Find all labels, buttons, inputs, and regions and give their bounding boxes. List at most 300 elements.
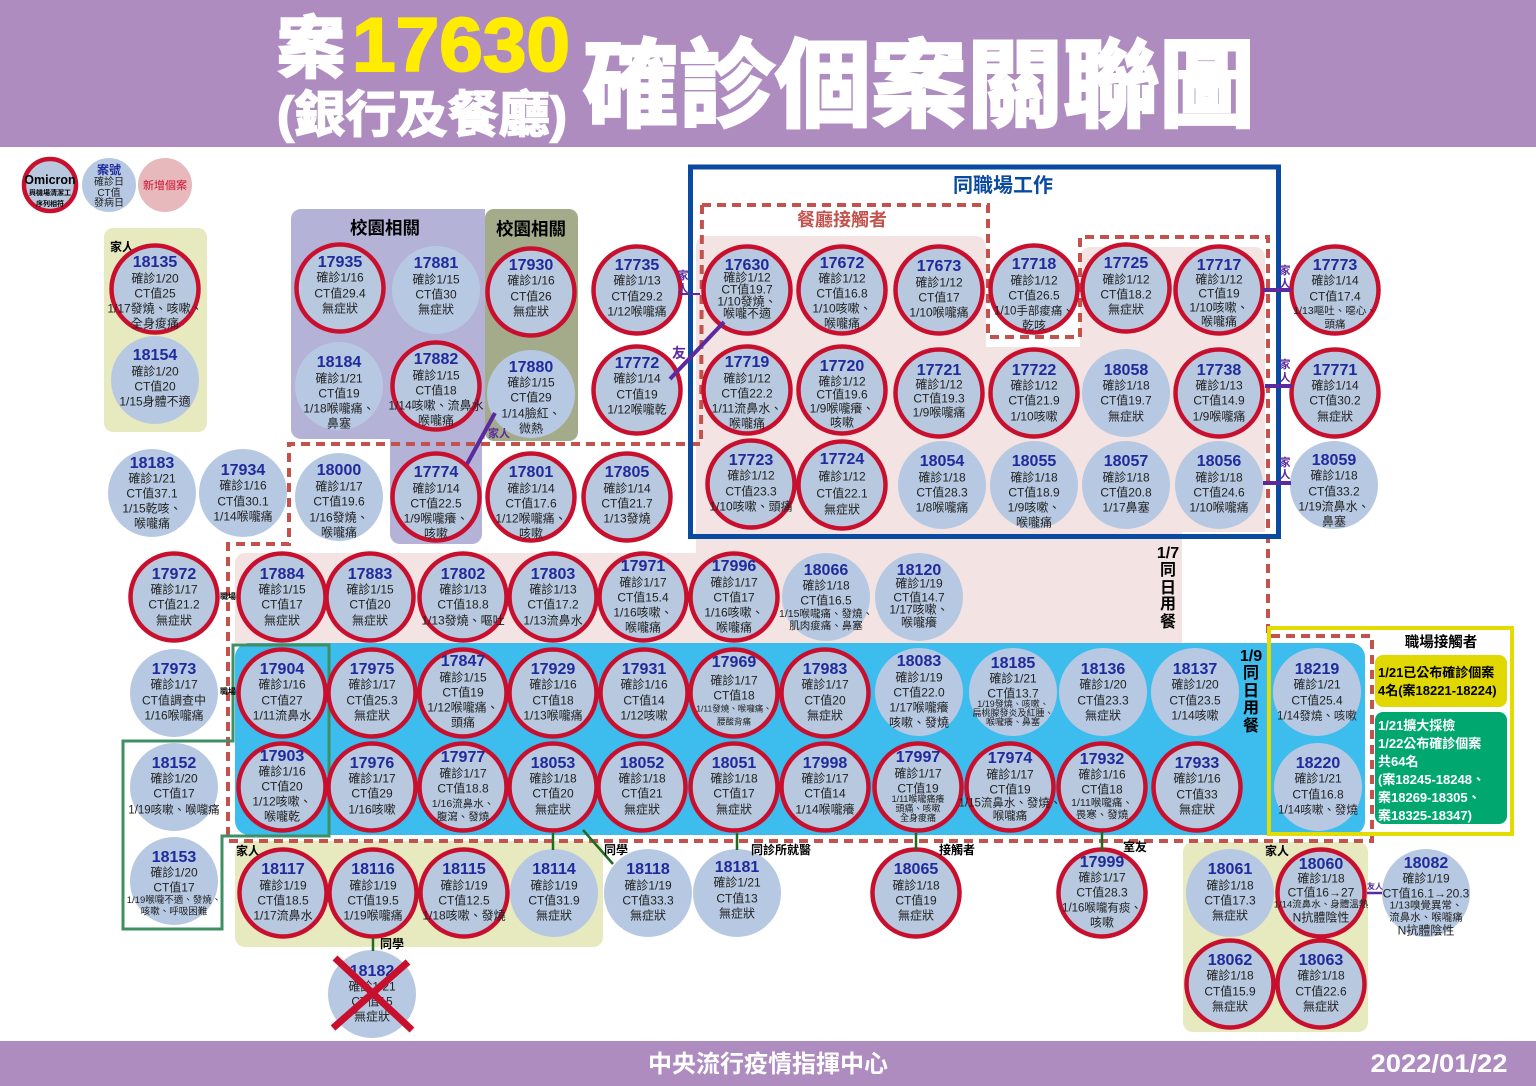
case 17983: 17983 xyxy=(803,661,847,678)
case 17738 xyxy=(1176,350,1262,436)
case 17847: 確診1/15 xyxy=(439,670,487,684)
case 17672: 確診1/12 xyxy=(818,270,866,286)
case 17773: 頭痛 xyxy=(1324,318,1346,330)
legend: omicron: Omicron xyxy=(24,173,76,187)
case 17904: CT值27 xyxy=(261,692,303,708)
case 18153: 咳嗽、呼吸困難 xyxy=(141,906,208,918)
case 17975: 確診1/17 xyxy=(348,676,396,692)
case 17971 xyxy=(600,554,686,640)
case 18058: 18058 xyxy=(1104,362,1148,379)
case 18183: CT值37.1 xyxy=(126,486,178,500)
case 18185 xyxy=(969,648,1057,736)
case 18082: N抗體陰性 xyxy=(1398,922,1454,938)
case 17738: CT值14.9 xyxy=(1193,392,1245,408)
legend: new case xyxy=(138,158,192,212)
panel: family bottom xyxy=(235,841,603,947)
case 18153: CT值17 xyxy=(153,880,195,894)
case 17929: 17929 xyxy=(531,661,575,678)
case 17976 xyxy=(328,744,416,830)
case 17772: 17772 xyxy=(615,355,659,372)
case 17801: 1/12喉嚨痛、 xyxy=(495,510,567,526)
case 18057: 1/17鼻塞 xyxy=(1102,500,1150,514)
case 17880 xyxy=(487,350,575,438)
case 18135: 1/17發燒、咳嗽、 xyxy=(107,300,203,316)
case 17672: 1/10咳嗽、 xyxy=(812,302,872,316)
case 18066: 肌肉痠痛、鼻塞 xyxy=(789,619,863,632)
case 17903: 喉嚨乾 xyxy=(264,808,300,824)
case 17720: 咳嗽 xyxy=(830,416,854,430)
case 17932: CT值18 xyxy=(1081,782,1123,796)
case 17983: 確診1/17 xyxy=(801,676,849,692)
case 18183: 喉嚨痛 xyxy=(134,516,170,530)
case 18051 xyxy=(690,744,778,830)
case 18053: CT值20 xyxy=(532,786,574,800)
case 18053: 確診1/18 xyxy=(529,770,577,786)
case 17904 xyxy=(238,650,326,736)
heading: restaurant contacts: 餐廳接觸者 xyxy=(797,209,887,230)
case 17738: 17738 xyxy=(1197,362,1241,379)
case 18058: CT值19.7 xyxy=(1100,392,1152,408)
case 17933: 無症狀 xyxy=(1179,802,1215,816)
case 17720: 17720 xyxy=(820,358,864,375)
link: 17735 to 17630 family: 家 xyxy=(678,268,688,282)
case 18082: 確診1/19 xyxy=(1402,870,1450,886)
case 18120: 確診1/19 xyxy=(895,576,943,590)
case 18136: CT值23.3 xyxy=(1077,692,1129,708)
case 17717: 喉嚨痛 xyxy=(1201,314,1237,328)
label: 1/9 same-day meal xyxy=(1240,648,1262,735)
case 18051: CT值17 xyxy=(713,786,755,800)
case 18115: 確診1/19 xyxy=(440,878,488,892)
case 17717: 17717 xyxy=(1197,257,1241,274)
case 18117: 1/17流鼻水 xyxy=(253,908,313,922)
case 18135 xyxy=(107,246,203,332)
family label: 家人 xyxy=(1265,843,1289,858)
title: case number: 17630 xyxy=(352,3,570,88)
legend: omicron: 與機場清潔工 xyxy=(29,188,71,197)
case 18120: 喉嚨癢 xyxy=(901,614,937,630)
case 17935: 17935 xyxy=(318,254,362,271)
case 17883: CT值20 xyxy=(349,596,391,612)
case 17884: 無症狀 xyxy=(264,612,300,628)
link: 17717 to 17773 family xyxy=(1263,263,1291,290)
case 17735: 確診1/13 xyxy=(613,272,661,288)
case 17983: 無症狀 xyxy=(807,708,843,722)
case 18058: 無症狀 xyxy=(1108,408,1144,424)
case 18057: 18057 xyxy=(1104,453,1148,470)
case 18059: 確診1/18 xyxy=(1310,468,1358,482)
case 17880: 17880 xyxy=(509,359,553,376)
case 18181 xyxy=(693,849,781,937)
case 18114: CT值31.9 xyxy=(528,892,580,908)
panel: family left xyxy=(104,228,207,432)
case 18117: 18117 xyxy=(261,861,305,878)
case 17720: CT值19.6 xyxy=(816,386,868,402)
case 17773: CT值17.4 xyxy=(1309,288,1361,304)
case 18083: 咳嗽、發燒 xyxy=(889,714,949,730)
case 18060: 1/14流鼻水、身體溫熱 xyxy=(1274,898,1369,910)
case 17977: CT值18.8 xyxy=(437,780,489,796)
case 17773: 17773 xyxy=(1313,257,1357,274)
case 17904: 17904 xyxy=(260,661,304,678)
case 17931: 1/12咳嗽 xyxy=(620,708,668,722)
case 17738: 1/9喉嚨痛 xyxy=(1193,408,1245,424)
case 17724: 無症狀 xyxy=(824,502,860,516)
footer agency: 中央流行疫情指揮中心 xyxy=(648,1051,888,1078)
case 17930: 確診1/16 xyxy=(507,272,555,288)
case 17931: 確診1/16 xyxy=(620,676,668,692)
callout: 1/22 cases: (案18245-18248、 xyxy=(1378,772,1485,787)
case 17771: 17771 xyxy=(1313,362,1357,379)
case 18183: 確診1/21 xyxy=(128,470,176,486)
link: 18060 to 18082 friend: 友人 xyxy=(1367,881,1383,891)
legend: omicron xyxy=(24,159,76,211)
case 18118: 18118 xyxy=(626,861,670,878)
case 17904: 1/11流鼻水 xyxy=(253,708,311,722)
case 18116: 1/19喉嚨痛 xyxy=(343,908,403,922)
case 18220: 1/14咳嗽、發燒 xyxy=(1278,802,1358,816)
case 17932: 確診1/16 xyxy=(1078,766,1126,782)
case 17974: 確診1/17 xyxy=(986,766,1034,782)
case 18135: CT值25 xyxy=(134,286,176,300)
case 17723: 確診1/12 xyxy=(727,468,775,482)
case 18056: 1/10喉嚨痛 xyxy=(1189,500,1249,514)
case 18185: 1/19發燒、咳嗽、 xyxy=(977,698,1049,709)
link: 17772 to 17630 friend: 友 xyxy=(672,345,686,361)
case 17772 xyxy=(594,346,680,434)
case 18065: 確診1/18 xyxy=(892,878,940,892)
case 17722: 確診1/12 xyxy=(1010,378,1058,392)
link: 17717 to 17773 family: 人 xyxy=(1280,277,1290,290)
case 17719: CT值22.2 xyxy=(721,386,773,400)
case 18056: CT值24.6 xyxy=(1193,484,1245,500)
case 18183: 1/15乾咳、 xyxy=(122,502,182,516)
case 18061: CT值17.3 xyxy=(1204,892,1256,908)
case 17771: 確診1/14 xyxy=(1311,378,1359,392)
case 18055: CT值18.9 xyxy=(1008,484,1060,500)
case 18060: 確診1/18 xyxy=(1297,870,1345,886)
case 18118: 確診1/19 xyxy=(624,878,672,892)
link: 17772 to 17630 friend xyxy=(670,322,724,379)
case 17672: 喉嚨痛 xyxy=(824,316,860,330)
case 18182 crossed out: CT值15 xyxy=(351,994,393,1008)
case 18136: 18136 xyxy=(1081,661,1125,678)
case 17847: CT值19 xyxy=(442,684,484,700)
case 17881: CT值30 xyxy=(415,286,457,302)
case 17722: 17722 xyxy=(1012,362,1056,379)
case 17971: 1/16咳嗽、 xyxy=(613,606,673,620)
label: 1/9 same-day meal: 同 xyxy=(1243,665,1259,682)
case 17718 xyxy=(990,246,1078,332)
case 18152: 1/19咳嗽、喉嚨痛 xyxy=(128,802,220,816)
box: same workplace xyxy=(690,167,1278,536)
case 18065: 18065 xyxy=(894,861,938,878)
case 18063: CT值22.6 xyxy=(1295,984,1347,998)
case 18181: CT值13 xyxy=(716,890,758,906)
case 17884: CT值17 xyxy=(261,596,303,612)
case 18056 xyxy=(1175,441,1263,529)
case 17774 xyxy=(392,454,480,540)
link: 17932 to 17999 roommate xyxy=(1102,832,1147,854)
case 17774: CT值22.5 xyxy=(410,496,462,510)
case 17801: CT值17.6 xyxy=(505,496,557,510)
case 18136 xyxy=(1059,648,1147,736)
callout: 1/21 cases: 1/21已公布確診個案 xyxy=(1378,665,1494,680)
case 17803: CT值17.2 xyxy=(527,596,579,612)
label: 1/9 same-day meal: 用 xyxy=(1243,700,1259,717)
case 18115: CT值12.5 xyxy=(438,892,490,908)
case 18083: 1/17喉嚨癢 xyxy=(889,700,949,714)
link: 17717 to 17773 family: 家 xyxy=(1280,263,1290,277)
case 17881 xyxy=(392,246,480,334)
case 17932: 17932 xyxy=(1080,751,1124,768)
case 17999: 17999 xyxy=(1080,854,1124,871)
case 17774: 17774 xyxy=(414,464,458,481)
case 17973: 1/16喉嚨痛 xyxy=(144,708,204,722)
case 17931 xyxy=(600,650,688,736)
case 17630 xyxy=(704,246,790,334)
case 17672 xyxy=(798,246,886,334)
panel: campus olive xyxy=(485,209,578,441)
case 18062: 確診1/18 xyxy=(1206,968,1254,982)
label: 1/7 same-day meal xyxy=(1157,545,1179,631)
case 17723: 1/10咳嗽、頭痛 xyxy=(709,498,793,514)
case 17997: 確診1/17 xyxy=(894,766,942,780)
case 17719 xyxy=(704,346,790,434)
case 17977: 17977 xyxy=(441,749,485,766)
case 18051: 無症狀 xyxy=(716,802,752,816)
case 17771: CT值30.2 xyxy=(1309,392,1361,408)
case 18185: 18185 xyxy=(991,655,1035,672)
case 17803 xyxy=(510,554,596,640)
title: main heading: 確診個案關聯圖 xyxy=(583,33,1255,140)
case 18062: 無症狀 xyxy=(1212,998,1248,1014)
family label: 家人 xyxy=(110,239,134,254)
case 17883: 無症狀 xyxy=(352,612,388,628)
case 18117: CT值18.5 xyxy=(257,892,309,908)
case 18061: 18061 xyxy=(1208,861,1252,878)
case 17903: CT值20 xyxy=(261,778,303,794)
case 17969: CT值18 xyxy=(713,688,755,702)
case 17972: 無症狀 xyxy=(156,612,192,628)
case 18185: CT值13.7 xyxy=(987,686,1039,700)
case 18137: CT值23.5 xyxy=(1169,692,1221,708)
case 17998 xyxy=(782,744,868,830)
case 18082: 流鼻水、喉嚨痛 xyxy=(1389,910,1463,924)
case 17975: 無症狀 xyxy=(354,708,390,722)
case 17772: 確診1/14 xyxy=(613,370,661,386)
case 17976: 確診1/17 xyxy=(348,770,396,786)
case 18082: 18082 xyxy=(1404,855,1448,872)
case 17672: 17672 xyxy=(820,255,864,272)
case 18054: 18054 xyxy=(920,453,964,470)
label: 1/7 same-day meal: 日 xyxy=(1160,580,1176,597)
case 18117: 確診1/19 xyxy=(259,878,307,892)
case 17997 xyxy=(874,744,962,830)
case 17883 xyxy=(326,554,414,640)
campus heading: 校園相關 xyxy=(350,218,420,238)
case 18000: CT值19.6 xyxy=(313,494,365,508)
case 17971: 17971 xyxy=(621,558,665,575)
case 17721: CT值19.3 xyxy=(913,390,965,406)
case 18185: 確診1/21 xyxy=(989,670,1037,686)
label: 1/7 same-day meal: 用 xyxy=(1160,596,1176,613)
case 17723 xyxy=(708,440,794,528)
case 17935: 無症狀 xyxy=(322,300,358,316)
case 17881: 無症狀 xyxy=(418,302,454,316)
case 17933: 確診1/16 xyxy=(1173,770,1221,786)
case 18051: 確診1/18 xyxy=(710,770,758,786)
link: 18116 to 18182 classmate: 同學 xyxy=(380,936,404,951)
link: 17932 to 17999 roommate: 室友 xyxy=(1123,839,1147,854)
legend: case info: 確診日 xyxy=(94,175,124,188)
case 17997: CT值19 xyxy=(897,780,939,796)
case 18137: 確診1/20 xyxy=(1171,676,1219,692)
case 18065 xyxy=(872,850,960,936)
case 17803: 確診1/13 xyxy=(529,582,577,596)
case 18220: 確診1/21 xyxy=(1294,770,1342,786)
callout: 1/22 cases: 1/22公布確診個案 xyxy=(1378,736,1481,751)
case 18054: CT值28.3 xyxy=(916,484,968,500)
case 17976: 1/16咳嗽 xyxy=(348,802,396,816)
link: 17774 to 17880 family xyxy=(467,413,510,464)
case 18062: 18062 xyxy=(1208,952,1252,969)
label: 1/9 same-day meal: 1/9 xyxy=(1240,648,1262,665)
case 17974: CT值19 xyxy=(989,782,1031,796)
case 18152: 18152 xyxy=(152,755,196,772)
case 17774: 1/9喉嚨癢、 xyxy=(404,510,468,526)
case 18055: 18055 xyxy=(1012,453,1056,470)
case 17723: CT值23.3 xyxy=(725,484,777,498)
case 18219 xyxy=(1273,648,1361,736)
case 18056: 確診1/18 xyxy=(1195,470,1243,484)
case 18181: 無症狀 xyxy=(719,906,755,920)
case 18182 crossed out: 18182 xyxy=(350,963,394,980)
case 17973: CT值調查中 xyxy=(142,692,206,708)
case 17935: CT值29.4 xyxy=(314,286,366,300)
icon: red cross xyxy=(333,958,412,1030)
case 17805: 1/13發燒 xyxy=(603,510,651,526)
case 17718: 1/10手部痠痛、 xyxy=(994,304,1074,318)
case 17880: 確診1/15 xyxy=(507,374,555,390)
case 18115: 1/18咳嗽、發燒 xyxy=(422,908,506,922)
case 17718: 17718 xyxy=(1012,256,1056,273)
case 17718: 乾咳 xyxy=(1022,318,1046,332)
panel: family bottom right xyxy=(1183,842,1368,1032)
case 17774: 確診1/14 xyxy=(412,480,460,496)
case 17996: 喉嚨痛 xyxy=(716,620,752,634)
case 18066: 1/15喉嚨痛、發燒、 xyxy=(779,607,873,620)
case 18054: 1/8喉嚨痛 xyxy=(916,500,968,514)
case 17930: CT值26 xyxy=(510,288,552,304)
case 17930: 17930 xyxy=(509,257,553,274)
case 17932: 1/11喉嚨痛、 xyxy=(1071,796,1133,809)
link: 17738 to 17771 family xyxy=(1265,357,1292,386)
case 18055: 1/9咳嗽、 xyxy=(1008,500,1060,514)
case 18137: 18137 xyxy=(1173,661,1217,678)
case 17881: 確診1/15 xyxy=(412,272,460,286)
case 17974: 喉嚨痛 xyxy=(993,808,1027,822)
case 17882: CT值18 xyxy=(415,382,457,398)
link: 18056 to 18059 family xyxy=(1263,455,1291,483)
case 17735: 1/12喉嚨痛 xyxy=(607,304,667,318)
link: 17997 to 18065 contact xyxy=(916,833,975,857)
case 18116: 確診1/19 xyxy=(349,878,397,892)
case 17972: CT值21.2 xyxy=(148,596,200,612)
case 17673 xyxy=(896,246,982,334)
case 17773: 確診1/14 xyxy=(1311,272,1359,288)
case 17719: 17719 xyxy=(725,354,769,371)
workplace heading: 同職場工作 xyxy=(953,174,1053,197)
legend xyxy=(24,158,192,212)
case 17805: 17805 xyxy=(605,464,649,481)
case 17720 xyxy=(798,346,886,434)
case 17882: 17882 xyxy=(414,351,458,368)
case 17880: 1/14臉紅、 xyxy=(501,406,561,420)
footer date: 2022/01/22 xyxy=(1370,1050,1508,1078)
case 18118 xyxy=(604,849,692,937)
case 17725: CT值18.2 xyxy=(1100,286,1152,302)
case 18058: 確診1/18 xyxy=(1102,378,1150,392)
case 17998: CT值14 xyxy=(804,786,846,800)
callout: 1/21 cases xyxy=(1375,655,1507,707)
case 18219: 18219 xyxy=(1295,661,1339,678)
case 18154: 確診1/20 xyxy=(131,364,179,378)
link: 17735 to 17630 family: 人 xyxy=(678,282,688,295)
case 17977: 腹瀉、發燒 xyxy=(437,810,490,823)
case 18183 xyxy=(108,449,196,537)
case 17975: 17975 xyxy=(350,661,394,678)
case 17735: CT值29.2 xyxy=(611,288,663,304)
case 18054 xyxy=(898,441,986,529)
case 17630: 17630 xyxy=(725,257,769,274)
case 17718: CT值26.5 xyxy=(1008,288,1060,302)
case 17999: 確診1/17 xyxy=(1078,870,1126,884)
case 17972 xyxy=(130,554,218,640)
case 17934: CT值30.1 xyxy=(217,494,269,508)
case 17884: 17884 xyxy=(260,566,304,583)
case 17996: 1/16咳嗽、 xyxy=(704,606,764,620)
case 17725: 無症狀 xyxy=(1108,302,1144,316)
case 17720: 確診1/12 xyxy=(818,374,866,388)
case 18120: 18120 xyxy=(897,562,941,579)
case 17934: 1/14喉嚨痛 xyxy=(213,508,273,524)
case 17933 xyxy=(1154,744,1240,830)
case 17933: 17933 xyxy=(1175,755,1219,772)
link: 18056 to 18059 family: 家 xyxy=(1280,455,1290,469)
case 18120: CT值14.7 xyxy=(893,590,945,604)
case 18219: 1/14發燒、咳嗽 xyxy=(1277,708,1357,722)
case 18059: 18059 xyxy=(1312,452,1356,469)
case 17801: 咳嗽 xyxy=(519,526,543,540)
case 17998: 17998 xyxy=(803,755,847,772)
case 17673: 確診1/12 xyxy=(915,274,963,290)
case 18083: 確診1/19 xyxy=(895,670,943,684)
case 18083: 18083 xyxy=(897,653,941,670)
case 17996: CT值17 xyxy=(713,590,755,604)
case 18059 xyxy=(1290,441,1378,529)
case 17983 xyxy=(782,650,868,736)
case 18182 crossed out xyxy=(328,950,416,1038)
case 18060: 18060 xyxy=(1299,856,1343,873)
case 17725 xyxy=(1082,244,1170,332)
case 17803: 1/13流鼻水 xyxy=(523,612,583,628)
link: 18051 to 18181 same clinic xyxy=(737,833,811,857)
case 18082: CT值16.1→20.3 xyxy=(1383,886,1470,900)
case 17720: 1/9喉嚨癢、 xyxy=(810,400,874,416)
case 17673: 17673 xyxy=(917,258,961,275)
case 17929: 1/13喉嚨痛 xyxy=(523,708,583,722)
